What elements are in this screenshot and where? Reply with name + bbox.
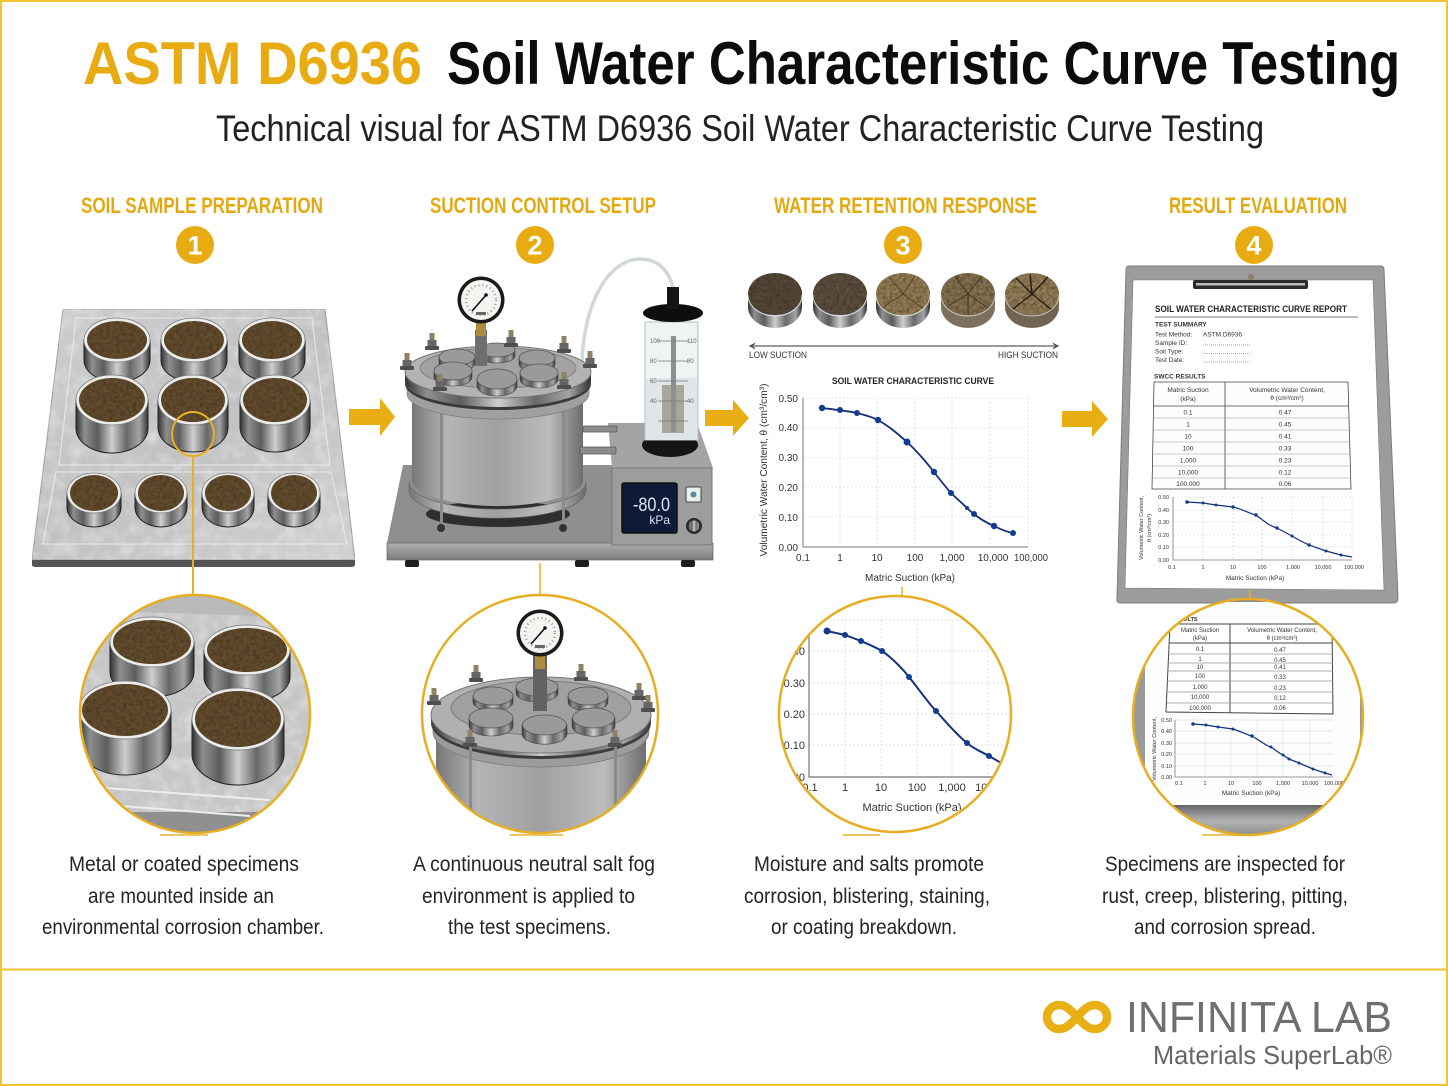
suction arrow scale: HIGH SUCTION (998, 350, 1058, 360)
caption 3: corrosion, blistering, staining, (744, 885, 990, 908)
detail circle 4: report close-up: 0.06 (1274, 706, 1286, 712)
caption 3: Moisture and salts promote (754, 853, 984, 876)
chart: soil water characteristic curve: Volumetric Water Content, θ (cm³/cm³) (759, 384, 770, 556)
arrow 3 (1062, 401, 1108, 437)
detail circle 4: report close-up: 0.00 (1161, 775, 1172, 781)
results table: (kPa) (1180, 396, 1196, 403)
detail circle 4: report close-up: 0.50 (1161, 718, 1172, 724)
digital display: kPa (649, 513, 670, 527)
detail circle 3: curve close-up: 0.40 (784, 646, 805, 658)
lid bolts (400, 330, 597, 391)
control box (608, 423, 713, 545)
chart: soil water characteristic curve: 0.10 (779, 513, 798, 524)
leader lines to detail circles (540, 563, 1250, 600)
results table: 0.41 (1279, 434, 1292, 440)
fittings (580, 426, 617, 454)
detail circle 4: report close-up: 1,000 (1276, 781, 1290, 787)
panel: soil specimen plate (32, 309, 355, 596)
graduated cylinder: 100 (650, 339, 661, 345)
mini curve chart: θ (cm³/cm³) (1147, 514, 1153, 542)
title (83, 30, 1400, 97)
graduated cylinder: 80 (650, 359, 657, 365)
mini curve chart: 0.20 (1158, 533, 1169, 539)
chart: soil water characteristic curve: 0.20 (779, 483, 798, 494)
gauge and stem (458, 276, 504, 366)
specimen cans (67, 318, 320, 527)
disc 5 (1005, 273, 1059, 328)
base plate (387, 465, 713, 567)
arrow 2 (705, 400, 749, 436)
results table: 0.1 (1183, 410, 1193, 416)
detail circle 3: curve close-up: 10 (875, 782, 887, 794)
detail circle 4: report close-up: 0.47 (1274, 648, 1286, 654)
chart: soil water characteristic curve: 0.1 (796, 553, 810, 564)
mini curve chart: 0.30 (1158, 520, 1169, 526)
heading: step 3: 3 (895, 230, 911, 260)
caption 3 (744, 853, 990, 939)
digital display (622, 483, 677, 533)
mini curve chart: 0.50 (1158, 495, 1169, 501)
icon: infinity mark (1047, 1005, 1107, 1029)
detail circle 4: report close-up: 0.33 (1274, 675, 1286, 681)
logo: Infinita Lab: Materials SuperLab® (1153, 1040, 1392, 1070)
detail circle 4: report close-up: 0.45 (1274, 658, 1286, 664)
detail circle 2: chamber close-up (420, 593, 660, 836)
results table: 1,000 (1180, 458, 1197, 464)
mini curve chart: 0.10 (1158, 545, 1169, 551)
detail circle 3: curve close-up: 100 (908, 782, 926, 794)
chamber body (409, 385, 586, 532)
detail circle 3: curve close-up: 0.1 (802, 782, 818, 794)
results table: 0.23 (1279, 458, 1292, 464)
mini curve chart: 100 (1257, 565, 1267, 571)
mini curve chart: 0.1 (1168, 565, 1176, 571)
suction arrow scale: LOW SUCTION (749, 350, 807, 360)
detail circle 4: report close-up: Volumetric Water Content, (1247, 628, 1317, 634)
close-up cans (79, 617, 290, 785)
results table: 0.06 (1279, 481, 1292, 488)
detail circle 4: report close-up: 0.1 (1196, 647, 1205, 653)
detail circle 4: report close-up: (kPa) (1193, 636, 1207, 642)
heading: step 2 (430, 193, 656, 264)
chart: soil water characteristic curve: 1,000 (939, 553, 965, 564)
clip (1193, 274, 1308, 289)
heading: step 1: 1 (187, 230, 203, 260)
detail circle 4: report close-up: 10,000 (1302, 781, 1318, 787)
chart: soil water characteristic curve: SOIL WATER CHARACTERISTIC CURVE (832, 376, 994, 386)
logo: Infinita Lab: INFINITA LAB (1126, 993, 1392, 1042)
detail circle 4: report close-up: 10 (1197, 665, 1204, 671)
detail circle 4: report close-up: 0.1 (1175, 781, 1183, 787)
mini curve chart: 1,000 (1286, 565, 1300, 571)
panel: report on clipboard (1117, 266, 1398, 603)
results table: 10,000 (1178, 470, 1198, 476)
detail circle 1: specimen close-up (78, 593, 313, 836)
heading: step 4: RESULT EVALUATION (1169, 193, 1347, 218)
specimen pucks (434, 343, 558, 396)
chamber lid (405, 346, 591, 419)
detail circle 4: report close-up: 0.41 (1274, 665, 1286, 671)
caption 2: the test specimens. (448, 916, 611, 939)
results table: 100 (1183, 446, 1194, 452)
results table: θ (cm³/cm³) (1270, 395, 1304, 402)
graduated cylinder: 40 (687, 399, 694, 405)
panel: soil discs by suction (748, 273, 1059, 360)
detail circle 4: report close-up: 0.10 (1161, 764, 1172, 770)
detail circle 3: curve close-up: 1 (842, 782, 848, 794)
caption 1 (42, 853, 324, 939)
test summary: TEST SUMMARY (1155, 322, 1207, 328)
logo: Infinita Lab (1047, 993, 1392, 1070)
detail circle 3: curve close-up: 0.30 (784, 678, 805, 690)
mini curve chart: 1 (1201, 565, 1205, 571)
detail circle 4: report close-up: 0.20 (1161, 752, 1172, 758)
detail circle 3: curve close-up: 10,000 (975, 782, 1009, 794)
detail circle 3: curve close-up: 0.00 (784, 772, 805, 784)
chart: soil water characteristic curve: 100,000 (1014, 553, 1048, 564)
graduated cylinder: 40 (650, 399, 657, 405)
disc 4 (941, 273, 995, 328)
title: ASTM D6936 (83, 30, 422, 97)
detail circle 4: report close-up: 0.40 (1161, 729, 1172, 735)
caption 4: and corrosion spread. (1134, 916, 1316, 939)
subtitle: Technical visual for ASTM D6936 Soil Water Characteristic Curve Testing (216, 108, 1264, 149)
test summary: Test Method: (1155, 332, 1192, 338)
caption 2: A continuous neutral salt fog (413, 853, 655, 876)
heading: step 1: SOIL SAMPLE PREPARATION (81, 193, 323, 218)
detail circle 4: report close-up: Matric Suction (kPa) (1222, 790, 1280, 797)
detail circle 4: report close-up: SWCC RESULTS (1154, 617, 1198, 623)
test summary: SWCC RESULTS (1154, 374, 1206, 380)
caption 1: are mounted inside an (88, 885, 274, 908)
chart: soil water characteristic curve: 0.30 (779, 453, 798, 464)
test summary: Sample ID: (1155, 340, 1187, 347)
chart: soil water characteristic curve: Matric Suction (kPa) (865, 573, 955, 584)
heading: step 3 (774, 193, 1037, 264)
results table: 0.12 (1279, 470, 1292, 476)
report heading: SOIL WATER CHARACTERISTIC CURVE REPORT (1155, 304, 1347, 314)
detail circle 4: report close-up: 0.12 (1274, 696, 1286, 702)
mini curve chart: Volumetric Water Content, (1139, 496, 1145, 560)
clipboard board (1117, 266, 1398, 603)
graduated cylinder: 80 (687, 359, 694, 365)
mini curve chart: 10,000 (1315, 565, 1331, 571)
disc 3 (876, 273, 930, 328)
chart: soil water characteristic curve: 10,000 (978, 553, 1009, 564)
detail circle 4: report close-up: 10 (1228, 781, 1234, 787)
detail circle 4: report close-up: 1 (1203, 781, 1207, 787)
chart: soil water characteristic curve: 0.50 (779, 394, 798, 405)
detail circle 4: report close-up: Matric Suction (1181, 628, 1219, 634)
chart: soil water characteristic curve: 0.00 (779, 543, 798, 554)
results table: 0.47 (1279, 410, 1292, 416)
arrow 1 (349, 398, 395, 436)
results table: 0.45 (1279, 422, 1292, 428)
mini curve chart: 0.40 (1158, 508, 1169, 514)
suction arrow scale (749, 344, 1058, 360)
results table: Volumetric Water Content, (1249, 387, 1325, 394)
results table: 0.33 (1279, 446, 1292, 452)
detail circle 3: curve close-up: 1,000 (938, 782, 966, 794)
tubing (582, 259, 673, 362)
detail circle 4: report close-up: 100,000 (1324, 781, 1344, 787)
caption 2: environment is applied to (422, 885, 635, 908)
chart: soil water characteristic curve: 100 (907, 553, 924, 564)
results table: 10 (1184, 434, 1192, 440)
caption 1: Metal or coated specimens (69, 853, 299, 876)
detail circle 4: report close-up: 1,000 (1192, 685, 1208, 691)
highlight ring and leader (172, 412, 214, 596)
caption 4: rust, creep, blistering, pitting, (1102, 885, 1348, 908)
disc 2 (813, 273, 867, 328)
mini curve chart (1139, 495, 1364, 582)
detail circle 3: curve close-up (778, 595, 1014, 835)
caption 1: environmental corrosion chamber. (42, 916, 324, 939)
paper sheet (1125, 280, 1384, 590)
results table: 1 (1186, 422, 1190, 428)
detail circle 4: report close-up: 10,000 (1191, 695, 1210, 701)
detail circle 4: report close-up: 100,000 (1189, 706, 1212, 712)
heading: step 1 (81, 193, 323, 264)
detail circle 4: report close-up: 1 (1198, 657, 1202, 663)
caption 3: or coating breakdown. (771, 916, 957, 939)
caption 2 (413, 853, 655, 939)
digital display: -80.0 (633, 495, 670, 516)
detail circle 4: report close-up: 100 (1195, 674, 1206, 680)
results table: 100,000 (1176, 481, 1200, 488)
chart: soil water characteristic curve: 10 (871, 553, 883, 564)
graduated cylinder: 110 (687, 339, 697, 345)
detail circle 4: report close-up: 0.23 (1274, 686, 1286, 692)
detail circle 3: curve close-up: 0.10 (784, 740, 805, 752)
detail circle 3: curve close-up: Matric Suction (kPa) (862, 802, 962, 814)
graduated cylinder (642, 287, 703, 457)
heading: step 2: 2 (527, 230, 543, 260)
results table (1152, 382, 1351, 489)
detail circle 3: curve close-up: 0.20 (784, 709, 805, 721)
chart: soil water characteristic curve (759, 376, 1048, 584)
test summary: Soil Type: (1155, 348, 1184, 356)
results table: Matric Suction (1167, 387, 1209, 394)
detail circle 4: report close-up: 0.30 (1161, 741, 1172, 747)
detail circle 4: report close-up (1130, 597, 1366, 837)
heading: step 4 (1169, 193, 1347, 264)
detail circle 4: report close-up: 100 (1252, 781, 1262, 787)
panel: suction chamber apparatus (387, 259, 713, 567)
chart: soil water characteristic curve: 1 (837, 553, 843, 564)
test summary (1154, 322, 1251, 380)
heading: step 4: 4 (1246, 230, 1262, 260)
mini curve chart: Matric Suction (kPa) (1226, 575, 1284, 582)
test summary: Test Date: (1155, 357, 1184, 364)
detail circle 4: report close-up: Volumetric Water Content, (1152, 717, 1158, 781)
mini curve chart: 0.00 (1158, 558, 1169, 564)
graduated cylinder: 60 (650, 379, 657, 385)
heading: step 2: SUCTION CONTROL SETUP (430, 193, 656, 218)
caption 4 (1102, 853, 1348, 939)
test summary: ASTM D6936 (1203, 332, 1242, 338)
caption 4: Specimens are inspected for (1105, 853, 1345, 876)
detail circle 4: report close-up: θ (cm³/cm³) (1267, 636, 1297, 642)
chart: soil water characteristic curve: 0.40 (779, 423, 798, 434)
mini curve chart: 100,000 (1344, 565, 1364, 571)
mini curve chart: 10 (1230, 565, 1236, 571)
disc 1 (748, 273, 802, 328)
heading: step 3: WATER RETENTION RESPONSE (774, 193, 1037, 218)
